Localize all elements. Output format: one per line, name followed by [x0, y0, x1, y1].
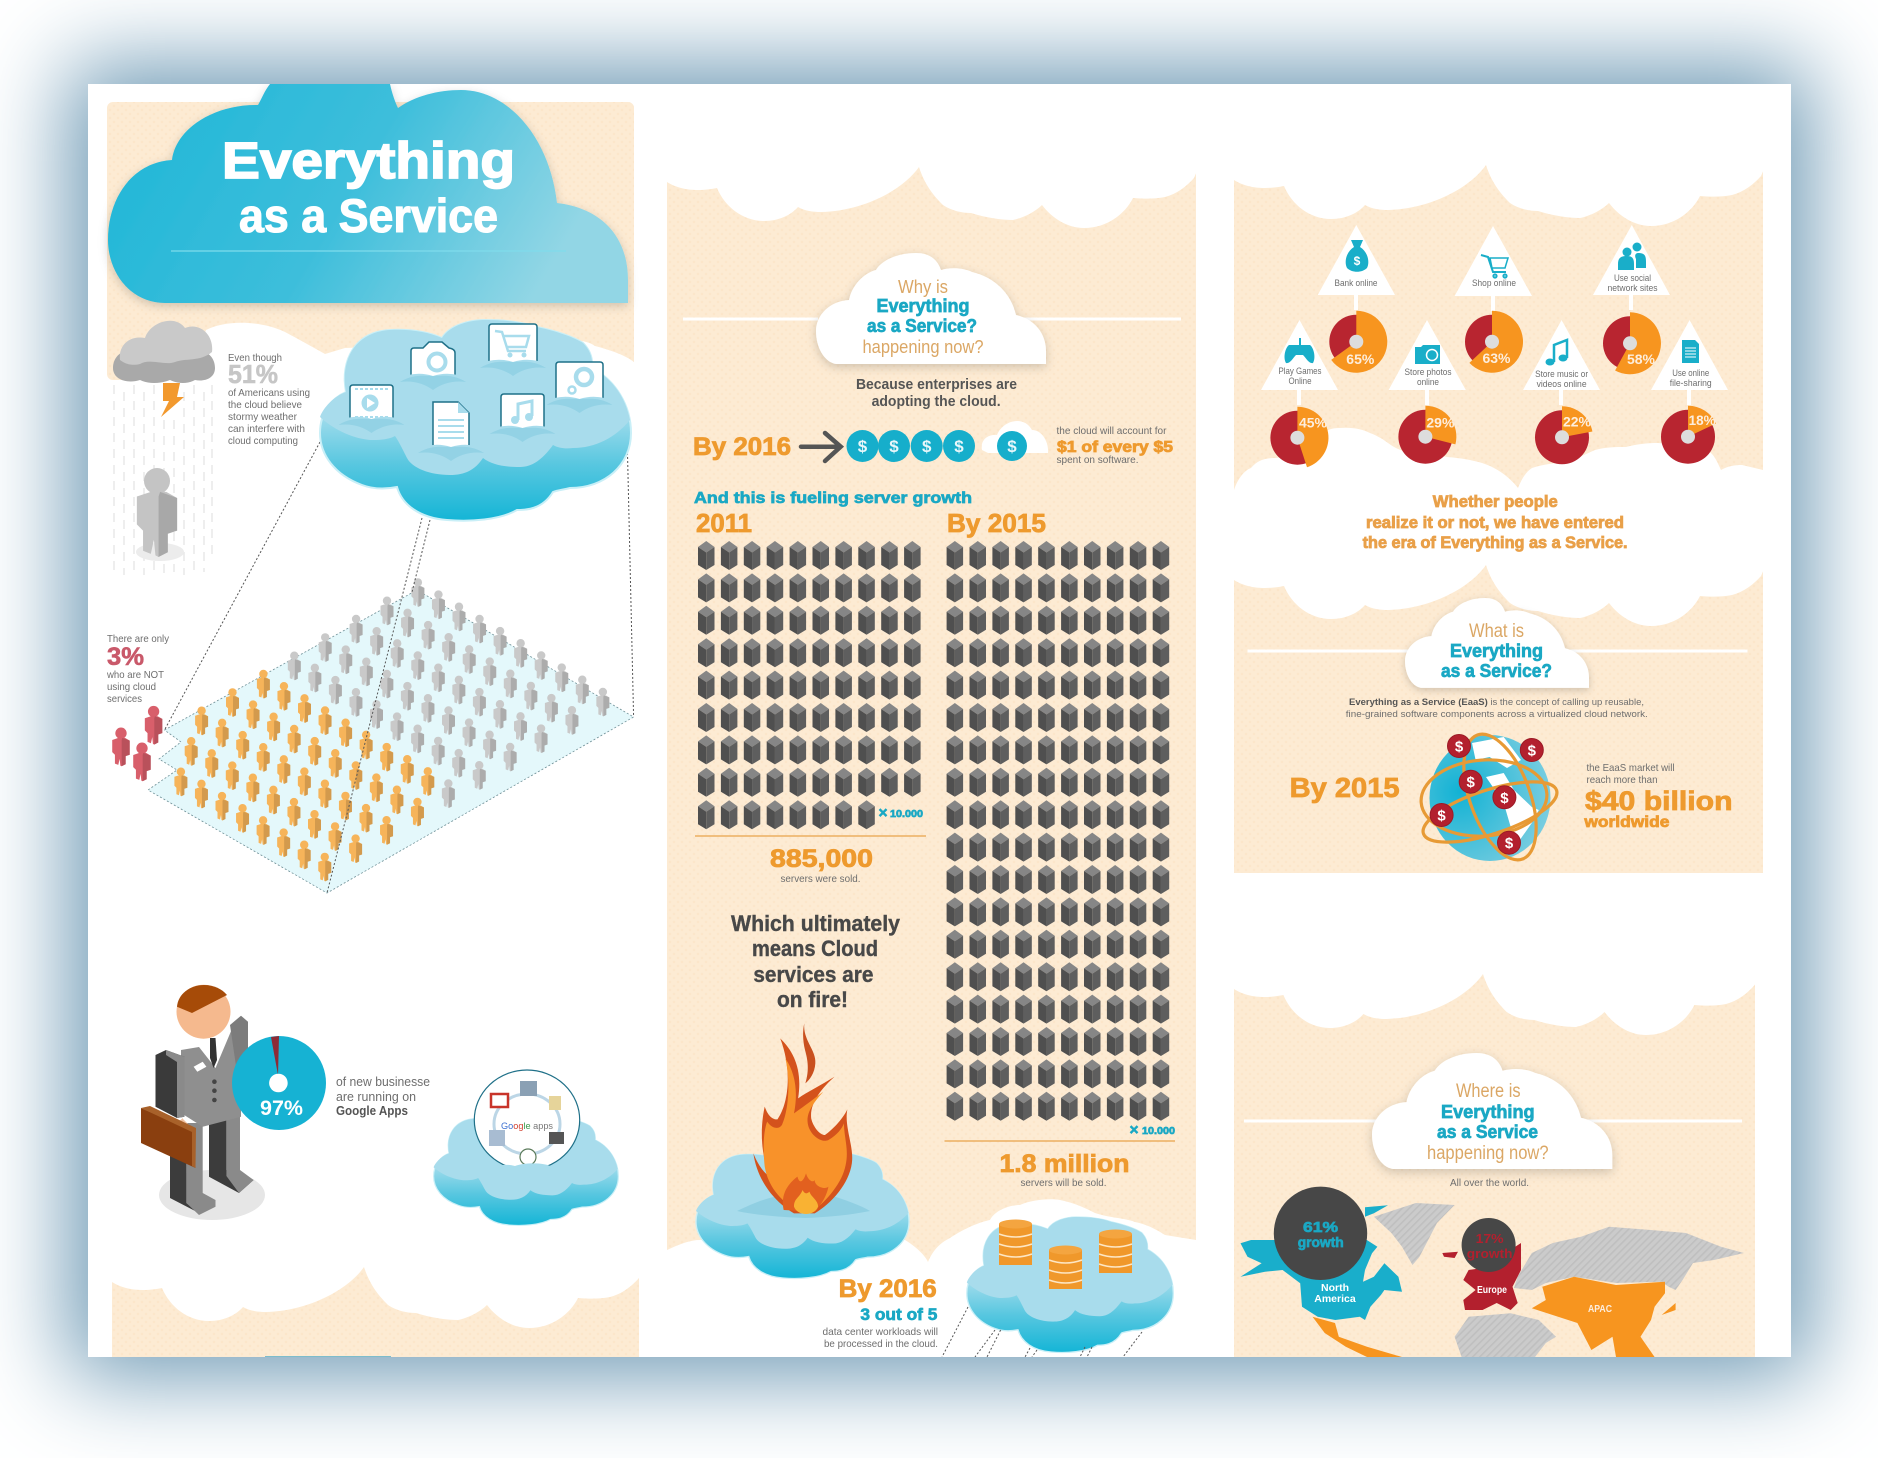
heading cloud: Why is	[898, 277, 948, 297]
heading cloud: as a Service	[1437, 1122, 1538, 1142]
globe with dollar badges: $	[1500, 790, 1509, 807]
icon: camera	[400, 342, 466, 390]
panel: bottom beige strip	[109, 1264, 645, 1357]
rain	[114, 385, 212, 575]
text: 40 billion: $40 billion	[1585, 786, 1732, 816]
text: one of every five: spent on software.	[1056, 455, 1138, 466]
chart: pie 29 percent: 29%	[1426, 416, 1454, 431]
world map	[1240, 1187, 1744, 1357]
title cloud: as a Service	[239, 189, 498, 242]
dashed lines below database cloud	[942, 1307, 1142, 1357]
icon: people	[1618, 242, 1646, 270]
callout: 17 percent growth: 17%	[1476, 1231, 1504, 1246]
text: by 2016 three out of five: be processed in the cloud.	[824, 1338, 938, 1350]
text: cloud services on fire: means Cloud	[752, 936, 878, 961]
text: definition: Everything as a Service (EaaS) is the concept of calling up reusable,	[1349, 697, 1644, 708]
icon row: dollar coins: $	[1007, 437, 1017, 456]
chart: pie 65 percent: 65%	[1346, 352, 1374, 367]
text: 40 billion: worldwide	[1583, 814, 1670, 831]
text: because enterprises	[856, 377, 1017, 410]
shop online: Shop online	[1472, 278, 1516, 289]
text: cloud services on fire: on fire!	[777, 987, 848, 1012]
text: one of every five: $1 of every $5	[1057, 439, 1173, 456]
chart: pie 22 percent	[1535, 406, 1592, 464]
icon: cart	[480, 324, 546, 376]
text: 51 percent: of Americans using	[228, 387, 310, 399]
store music or videos online: videos online	[1537, 379, 1587, 390]
text: one of every five	[1056, 426, 1173, 466]
text: 51 percent: 51%	[228, 359, 278, 389]
text: definition: fine-grained software components across a virtualized cloud network.	[1346, 709, 1648, 720]
teal sliver at page bottom	[265, 1356, 391, 1357]
panel: title and people column	[100, 84, 645, 1358]
icon: storm cloud	[113, 321, 215, 417]
bank online	[1318, 225, 1395, 310]
title cloud	[108, 84, 628, 303]
panel: where is everything as a service	[1231, 971, 1761, 1357]
icon: game controller	[1285, 338, 1314, 363]
chart: pie 63 percent	[1465, 311, 1523, 373]
stat: 1.8 million: servers will be sold.	[1020, 1177, 1106, 1189]
text: 51 percent: Even though	[228, 352, 282, 364]
shop online	[1455, 226, 1532, 311]
legend: times 10,000 (2015): ✕	[1129, 1123, 1139, 1137]
icon: music note	[1546, 340, 1568, 366]
divider line	[1248, 650, 1748, 652]
dashed connector lines	[164, 442, 634, 893]
text: Google Apps: are running on	[336, 1089, 416, 1104]
use online file-sharing: Use online	[1672, 368, 1709, 379]
text: 3 percent: who are NOT	[106, 669, 165, 681]
text: by 2016 three out of five: By 2016	[839, 1275, 937, 1303]
chart: pie 22 percent: 22%	[1563, 415, 1591, 430]
icon: document	[418, 402, 484, 461]
text: by 2016 three out of five: 3 out of 5	[860, 1305, 937, 1324]
icon: database left	[999, 1220, 1032, 1265]
icon row: dollar coins: $	[954, 437, 964, 456]
icon: database right	[1099, 1230, 1132, 1273]
icon row: dollar coins	[846, 421, 1048, 462]
callout: 61 percent growth: growth	[1298, 1234, 1344, 1250]
play games online	[1261, 320, 1338, 405]
globe with dollar badges	[1417, 725, 1563, 869]
chart: pie 65 percent	[1329, 311, 1387, 373]
icon: document	[1682, 340, 1699, 363]
legend: times 10,000 (2011): 10.000	[890, 809, 923, 820]
heading: 2011: 2011	[696, 508, 752, 538]
icon: music	[490, 394, 556, 442]
text: Google Apps	[336, 1074, 430, 1118]
page frame with blue shadow	[88, 84, 1791, 1357]
text: 3 percent: services	[107, 693, 142, 705]
globe with dollar badges: $	[1437, 808, 1446, 824]
legend: times 10,000 (2011): ✕	[878, 806, 888, 820]
icon row: dollar coins: $	[889, 437, 899, 456]
text: 51 percent	[228, 352, 310, 447]
map: North America: North	[1321, 1282, 1349, 1294]
chart: pie 29 percent	[1398, 406, 1456, 464]
text: 3 percent	[106, 633, 170, 705]
map: Europe: Europe	[1477, 1285, 1507, 1296]
store photos online: Store photos	[1404, 367, 1452, 378]
chart: 97 percent pie	[232, 1036, 326, 1130]
heading cloud: Everything	[1450, 641, 1543, 661]
chart: pie 63 percent: 63%	[1482, 351, 1510, 366]
text: Google Apps: Google Apps	[336, 1104, 408, 1118]
white bottom clouds	[667, 1199, 1196, 1357]
panel: what is everything as a service	[1231, 562, 1767, 873]
text: whether people realize: the era of Everything as a Service.	[1363, 534, 1628, 552]
icon row: dollar coins: $	[922, 437, 932, 456]
platform	[148, 590, 634, 893]
text: cloud services on fire: Which ultimately	[731, 911, 901, 936]
stat: 885,000	[695, 836, 926, 885]
text: by 2016 three out of five	[822, 1275, 938, 1350]
play games online: Online	[1288, 376, 1312, 387]
map: APAC: APAC	[1588, 1304, 1612, 1315]
text: cloud services on fire: services are	[753, 962, 873, 987]
heading cloud	[1405, 598, 1589, 688]
text: whether people realize: Whether people	[1433, 493, 1558, 511]
store music or videos online	[1523, 320, 1600, 405]
map: North America	[1240, 1205, 1402, 1320]
heading cloud: as a Service?	[1441, 661, 1552, 681]
callout: 17 percent growth	[1462, 1218, 1516, 1272]
heading cloud: as a Service?	[867, 316, 977, 336]
bank online: Bank online	[1334, 278, 1378, 289]
map: Europe	[1442, 1243, 1521, 1310]
chart: pie 58 percent: 58%	[1627, 352, 1655, 367]
text: 3 percent: There are only	[107, 633, 170, 645]
icon: cart	[1481, 255, 1508, 278]
text: one of every five: the cloud will account for	[1056, 426, 1167, 437]
chart: servers 2015	[947, 541, 1169, 1121]
text: 51 percent: the cloud believe	[228, 399, 302, 411]
text: by 2016: By 2016	[693, 433, 791, 461]
big cloud with service icons	[320, 320, 631, 521]
globe with dollar badges: $	[1467, 774, 1476, 791]
store photos online	[1389, 320, 1466, 405]
heading cloud: Everything	[876, 296, 970, 316]
heading cloud: happening now?	[1427, 1143, 1549, 1164]
callout: 17 percent growth: growth	[1467, 1246, 1513, 1261]
use social network sites: network sites	[1608, 283, 1658, 294]
text: Google Apps: of new businesse	[336, 1074, 430, 1089]
stat: 885,000: servers were sold.	[780, 873, 860, 885]
arrow	[801, 433, 841, 461]
panel: why everything as a service	[664, 164, 1200, 1357]
chart: pie 45 percent: 45%	[1299, 416, 1327, 431]
globe with dollar badges: $	[1505, 835, 1514, 852]
text: 51 percent: can interfere with	[228, 423, 305, 435]
database cloud	[967, 1217, 1173, 1352]
heading cloud: Where is	[1456, 1081, 1520, 1102]
icon: money bag: $	[1354, 254, 1361, 268]
icon row: dollar coins: $	[858, 437, 868, 456]
use online file-sharing	[1651, 320, 1728, 405]
text: 51 percent: stormy weather	[228, 411, 297, 423]
icon: video	[338, 385, 404, 433]
map: North America: America	[1314, 1293, 1356, 1305]
text: by 2015: By 2015	[1290, 772, 1400, 803]
text: whether people realize: realize it or not, we have entered	[1366, 514, 1624, 532]
heading cloud: happening now?	[862, 337, 984, 357]
chart: pie 58 percent	[1603, 312, 1661, 374]
gray people	[288, 578, 609, 808]
use social network sites: Use social	[1614, 273, 1651, 284]
stat: 1.8 million: 1.8 million	[1000, 1150, 1130, 1178]
text: cloud services on fire	[731, 911, 901, 1012]
icon: database middle	[1049, 1246, 1082, 1289]
stat: 885,000: 885,000	[770, 845, 873, 873]
fire on cloud	[696, 1023, 909, 1278]
text: 3 percent: using cloud	[107, 681, 156, 693]
map: APAC	[1532, 1277, 1676, 1357]
legend: times 10,000 (2015): 10.000	[1142, 1126, 1175, 1137]
callout: 61 percent growth	[1274, 1187, 1367, 1280]
text: all over the world: All over the world.	[1450, 1177, 1529, 1189]
map: gray regions	[1374, 1203, 1744, 1357]
chart: pie 45 percent	[1270, 407, 1328, 467]
text: whether people realize	[1363, 493, 1628, 552]
badges	[1430, 734, 1543, 854]
text: 40 billion: the EaaS market will	[1586, 762, 1674, 774]
chart: pie 18 percent	[1661, 406, 1716, 464]
legend: times 10,000 (2015)	[1129, 1123, 1175, 1137]
heading: by 2015: By 2015	[947, 508, 1046, 538]
businessman figure	[141, 985, 265, 1220]
orange people	[174, 670, 434, 881]
play games online: Play Games	[1278, 366, 1322, 377]
text: 51 percent: cloud computing	[228, 435, 298, 447]
store music or videos online: Store music or	[1535, 369, 1588, 380]
text: 40 billion	[1583, 762, 1732, 831]
text: because enterprises: Because enterprises are	[856, 377, 1017, 393]
panel: online activities	[1231, 162, 1767, 552]
white clouds below activities	[1234, 428, 1763, 500]
chart: servers 2011	[698, 541, 921, 829]
title cloud: Everything	[222, 132, 515, 189]
legend: times 10,000 (2011)	[878, 806, 923, 820]
divider line	[1244, 1120, 1742, 1122]
stat: 1.8 million	[944, 1141, 1175, 1189]
store photos online: online	[1417, 377, 1439, 388]
chart: 97 percent pie: 97%	[260, 1097, 303, 1120]
heading cloud: What is	[1469, 621, 1524, 642]
text: 40 billion: reach more than	[1586, 774, 1658, 786]
page content	[88, 84, 1791, 1358]
heading cloud	[816, 253, 1046, 364]
figure in the rain	[136, 468, 184, 561]
use social network sites	[1593, 225, 1670, 310]
use online file-sharing: file-sharing	[1670, 378, 1712, 389]
Google apps cloud	[434, 1070, 618, 1225]
icon: gears	[546, 362, 612, 413]
text: because enterprises: adopting the cloud.	[872, 394, 1001, 410]
infographic canvas	[104, 84, 1763, 1357]
globe with dollar badges: $	[1455, 738, 1464, 756]
text: 3 percent: 3%	[107, 643, 144, 671]
map: Central America	[1312, 1317, 1402, 1357]
red people	[112, 706, 162, 781]
page white background	[88, 84, 1791, 1357]
chart: pie 18 percent: 18%	[1689, 413, 1716, 428]
text: by 2016 three out of five: data center workloads will	[822, 1326, 938, 1338]
text: definition	[1346, 697, 1648, 720]
Google apps cloud: Google apps	[501, 1121, 553, 1132]
heading cloud	[1372, 1053, 1612, 1169]
divider line	[683, 318, 1181, 320]
callout: 61 percent growth: 61%	[1303, 1219, 1338, 1236]
globe with dollar badges: $	[1528, 742, 1537, 760]
icon: camera	[1415, 345, 1440, 364]
heading: server growth: And this is fueling server growth	[694, 490, 972, 507]
heading cloud: Everything	[1441, 1102, 1535, 1122]
